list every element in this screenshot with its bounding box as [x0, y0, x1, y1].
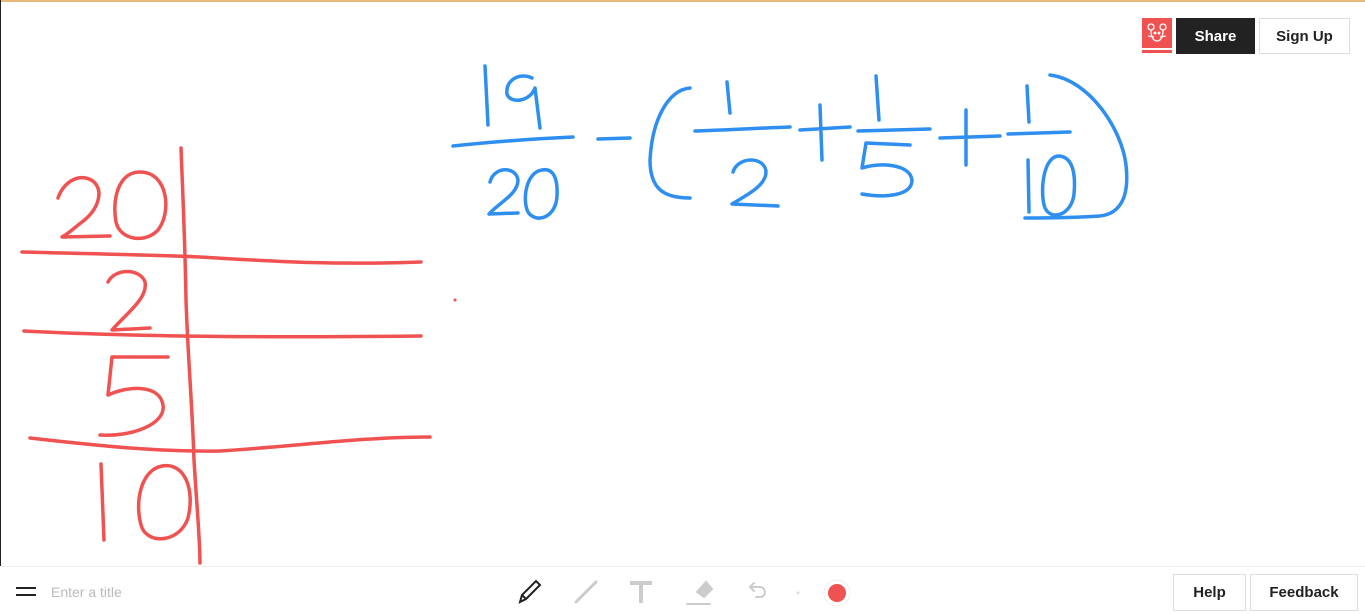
share button [1176, 18, 1255, 54]
help button [1173, 574, 1246, 611]
red table drawing [22, 148, 456, 563]
blue expression [453, 66, 1127, 218]
feedback button: Feedback [1269, 584, 1339, 601]
share button: Share [1195, 28, 1236, 44]
bottom toolbar [0, 566, 1365, 614]
feedback button [1250, 574, 1358, 611]
tool icons [518, 580, 850, 606]
top border [0, 0, 1365, 2]
sign up button [1259, 18, 1350, 54]
logo icon [1142, 18, 1172, 53]
sign up button: Sign Up [1276, 28, 1333, 44]
help button: Help [1193, 584, 1226, 601]
title input: Enter a title [51, 584, 122, 600]
left border [0, 0, 1, 566]
menu icon [16, 587, 36, 596]
